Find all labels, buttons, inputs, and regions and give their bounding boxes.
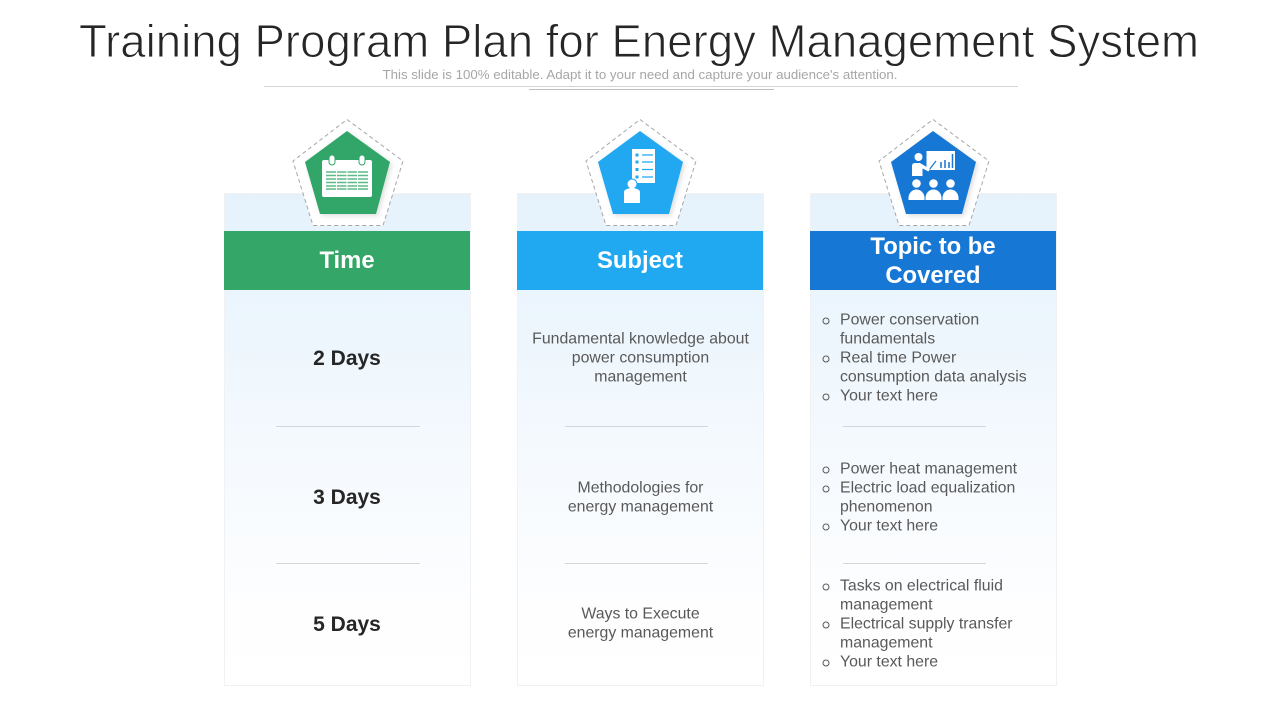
subject header: Subject <box>597 247 683 274</box>
topic list 3: Tasks on electrical fluid <box>840 578 1003 594</box>
title: Training Program Plan for Energy Management System <box>79 15 1199 67</box>
duration: 3 days: 3 Days <box>313 486 381 509</box>
topic list 3: management <box>840 596 933 614</box>
topic list 3 <box>823 578 1013 670</box>
subject text 3: energy management <box>568 624 714 642</box>
topic list 2: phenomenon <box>840 498 933 516</box>
duration: 2 days: 2 Days <box>313 347 381 370</box>
topic list 1: Your text here <box>840 388 938 404</box>
topic list 1: Power conservation <box>840 312 979 328</box>
icon: person with list pentagon <box>586 120 696 226</box>
panel: time <box>224 120 470 686</box>
subtitle: This slide is 100% editable. Adapt it to your need and capture your audience's attention. <box>382 67 898 82</box>
topic list 3: Your text here <box>840 654 938 670</box>
panel: subject <box>517 120 764 686</box>
topic list 2: Your text here <box>840 518 938 534</box>
topic list 2: Power heat management <box>840 460 1017 478</box>
time header: Time <box>319 247 375 274</box>
subject text 2: Methodologies for <box>578 480 703 496</box>
topic list 3: management <box>840 634 933 652</box>
topic header: Covered <box>885 262 981 289</box>
topic list 3: Electrical supply transfer <box>840 616 1013 632</box>
topic header: Topic to be <box>870 233 996 260</box>
topic header <box>810 231 1056 290</box>
icon: presenter and audience pentagon <box>879 120 989 226</box>
topic list 1: Real time Power <box>840 350 957 366</box>
subject header <box>517 231 763 290</box>
subject text 3: Ways to Execute <box>581 606 700 622</box>
subject text 1: Fundamental knowledge about <box>532 330 749 348</box>
subject text 1: management <box>594 368 687 386</box>
time header <box>224 231 470 290</box>
topic list 1: fundamentals <box>840 330 935 348</box>
topic list 2 <box>823 460 1018 534</box>
topic list 1: consumption data analysis <box>840 368 1027 386</box>
subject text 2: energy management <box>568 498 714 516</box>
topic list 2: Electric load equalization <box>840 480 1015 496</box>
panel: topic to be covered <box>810 120 1056 686</box>
topic list 1 <box>823 312 1027 404</box>
duration: 5 days: 5 Days <box>313 613 381 636</box>
subject text 1: power consumption <box>572 350 709 366</box>
icon: calendar pentagon <box>293 120 403 226</box>
